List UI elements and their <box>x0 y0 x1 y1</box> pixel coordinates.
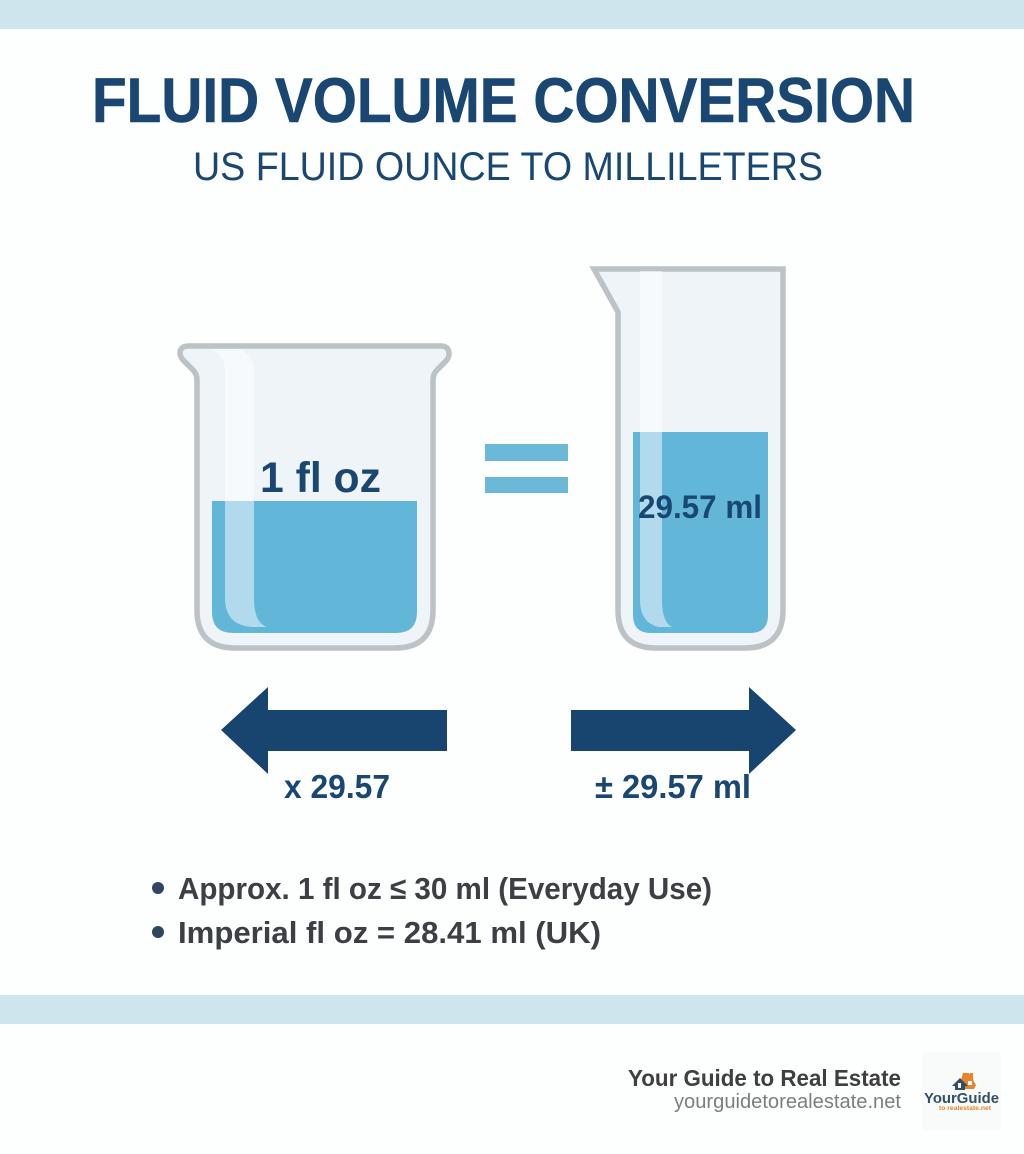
glass highlight <box>213 349 267 627</box>
liquid <box>633 432 768 633</box>
right cylinder: 29.57 ml <box>594 269 783 648</box>
glass highlight <box>640 271 672 627</box>
logo tagline: to realestate.net <box>939 1105 992 1112</box>
bottom band <box>0 995 1024 1024</box>
logo house <box>952 1073 976 1090</box>
label: 1 fl oz: 1 fl oz <box>260 454 381 502</box>
equals sign <box>485 444 568 493</box>
bullet 1: Approx. 1 fl oz ≤ 30 ml (Everyday Use) <box>178 871 712 906</box>
subtitle: US FLUID OUNCE TO MILLILETERS <box>193 145 823 189</box>
footer brand name: Your Guide to Real Estate <box>628 1065 901 1091</box>
label: 29.57 ml: 29.57 ml <box>638 489 762 525</box>
liquid <box>212 501 417 633</box>
left arrow <box>221 687 447 774</box>
top band <box>0 0 1024 29</box>
left beaker: 1 fl oz <box>180 346 449 648</box>
footer url: yourguidetorealestate.net <box>674 1091 901 1113</box>
left arrow label: x 29.57 <box>284 768 390 805</box>
logo <box>922 1052 1001 1131</box>
cylinder glass body <box>594 269 783 648</box>
title: FLUID VOLUME CONVERSION <box>92 66 915 136</box>
logo tile <box>922 1052 1001 1131</box>
beaker glass body <box>180 346 449 648</box>
bullet notes <box>152 871 712 950</box>
bullet 2: Imperial fl oz = 28.41 ml (UK) <box>178 915 601 950</box>
right arrow <box>571 687 796 774</box>
logo wordmark: YourGuide <box>924 1090 999 1107</box>
right arrow label: ± 29.57 ml <box>595 768 751 805</box>
